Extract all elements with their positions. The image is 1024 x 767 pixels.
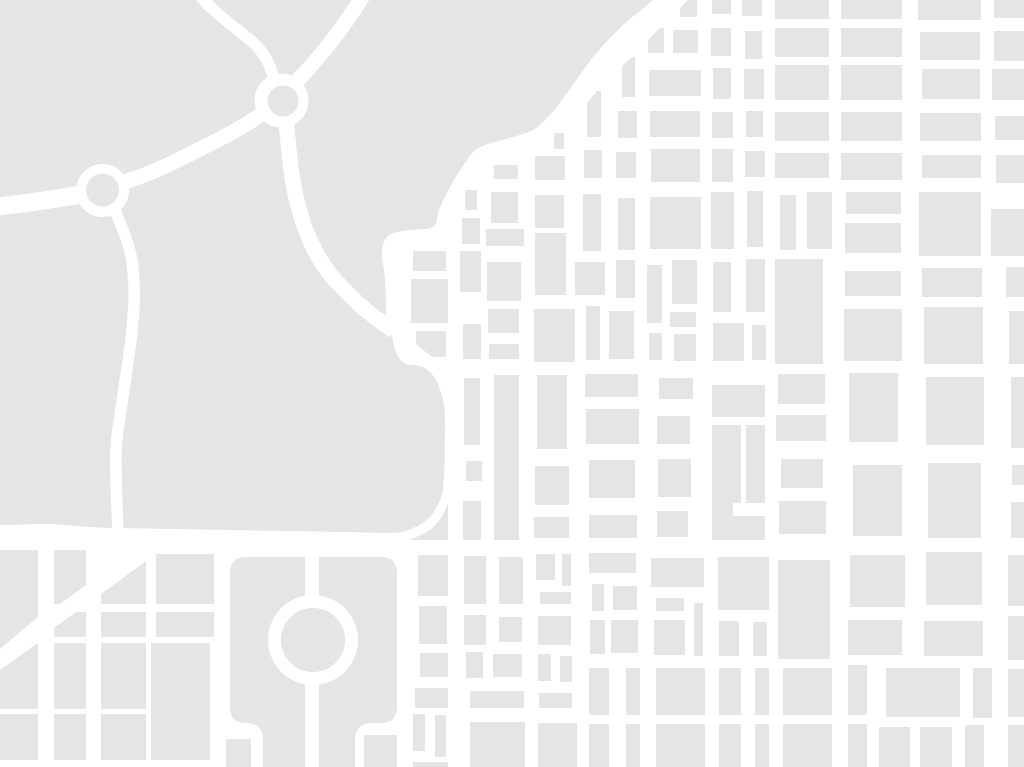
- road: north-east avenue: [294, 0, 363, 84]
- road: north branch: [200, 0, 274, 80]
- blocks: south-west district: [0, 550, 397, 767]
- blocks: north-east grid: [711, 0, 1024, 256]
- blocks: central district: [410, 251, 697, 540]
- blocks: shoreline district: [462, 0, 701, 295]
- road: main curved avenue: [120, 110, 268, 183]
- central square with circle: [230, 550, 397, 767]
- road: south-east curve: [286, 120, 394, 331]
- blocks: south-east district: [718, 552, 1024, 767]
- roundabout: west: [76, 164, 129, 217]
- roundabout: north: [254, 74, 308, 128]
- square road spine: [305, 550, 319, 767]
- blocks: east district: [712, 259, 1024, 540]
- road: south-west branch: [115, 210, 134, 532]
- blocks: south-central district: [413, 553, 705, 767]
- park land: [0, 0, 653, 533]
- road: west avenue: [0, 194, 85, 206]
- square roundabout: [274, 602, 352, 678]
- park area with roads: [0, 0, 653, 533]
- square block: [230, 557, 397, 767]
